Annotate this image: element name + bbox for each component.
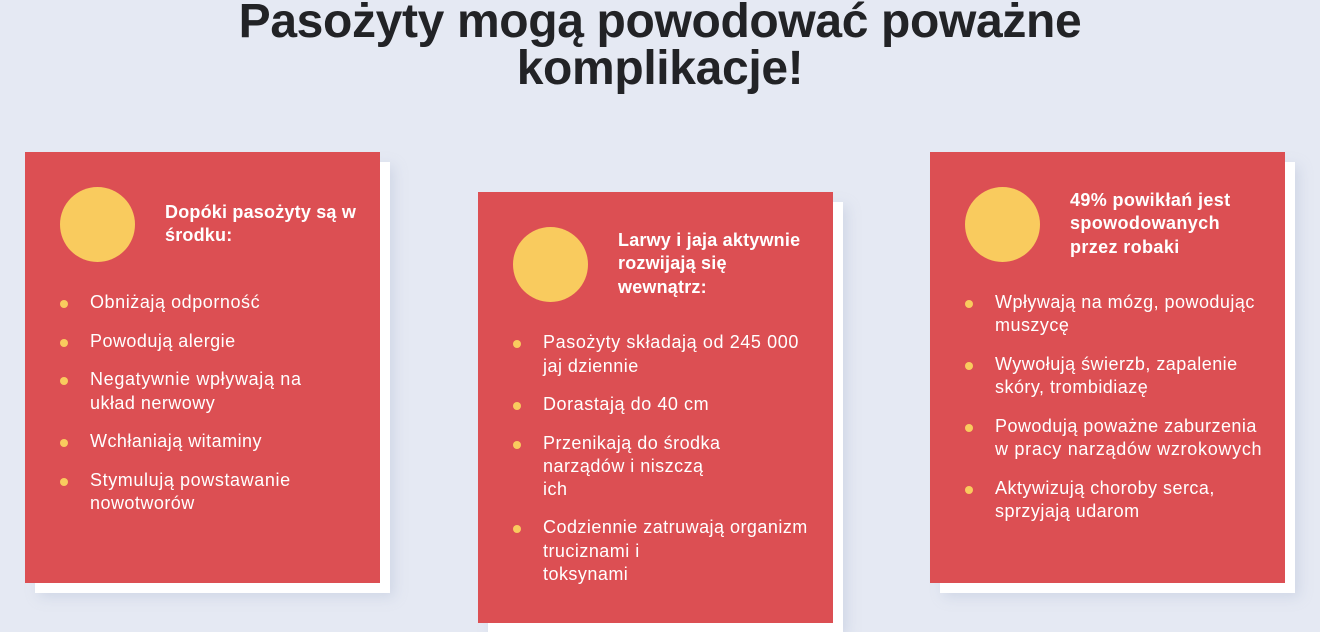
left card heading: środku: xyxy=(165,225,232,245)
right item 3 xyxy=(995,415,1262,462)
icon: right circle xyxy=(965,187,1040,262)
panel: left card xyxy=(25,152,380,583)
card shadow: right xyxy=(940,162,1295,593)
right item 1: muszycę xyxy=(995,315,1069,335)
middle item 4 xyxy=(543,516,808,587)
middle card heading: wewnątrz: xyxy=(618,277,707,297)
middle item 4: truciznami i xyxy=(543,541,640,561)
middle item 3 xyxy=(543,432,720,502)
left item 5: nowotworów xyxy=(90,493,195,513)
right item 3: Powodują poważne zaburzenia xyxy=(995,416,1257,436)
panel: right card xyxy=(930,152,1285,583)
middle item 1: jaj dziennie xyxy=(543,356,639,376)
left item 3 xyxy=(90,368,302,415)
card shadow: middle xyxy=(488,202,843,632)
middle item 2: Dorastają do 40 cm xyxy=(543,394,709,414)
left item 2: Powodują alergie xyxy=(90,331,236,351)
left item 5: Stymulują powstawanie xyxy=(90,470,291,490)
left item 3: Negatywnie wpływają na xyxy=(90,369,302,389)
middle item 1: Pasożyty składają od 245 000 xyxy=(543,332,799,352)
middle card heading xyxy=(618,230,800,297)
left card heading: Dopóki pasożyty są w xyxy=(165,202,356,222)
right item 4 xyxy=(995,477,1215,524)
right item 1: Wpływają na mózg, powodując xyxy=(995,292,1255,312)
middle item 3: ich xyxy=(543,479,567,499)
right card heading: spowodowanych xyxy=(1070,213,1220,233)
icon: left circle xyxy=(60,187,135,262)
panel: middle card xyxy=(478,192,833,623)
right item 2: skóry, trombidiazę xyxy=(995,377,1148,397)
card shadow: left xyxy=(35,162,390,593)
right card heading: 49% powikłań jest xyxy=(1070,190,1231,210)
icon: middle circle xyxy=(513,227,588,302)
middle item 4: toksynami xyxy=(543,564,628,584)
right item 2 xyxy=(995,353,1238,400)
left item 3: układ nerwowy xyxy=(90,393,215,413)
middle item 4: Codziennie zatruwają organizm xyxy=(543,517,808,537)
middle item 1 xyxy=(543,331,799,378)
right item 4: Aktywizują choroby serca, xyxy=(995,478,1215,498)
middle card heading: Larwy i jaja aktywnie xyxy=(618,230,800,250)
left item 4: Wchłaniają witaminy xyxy=(90,431,262,451)
right item 3: w pracy narządów wzrokowych xyxy=(995,439,1262,459)
title: komplikacje! xyxy=(517,42,803,94)
right card heading: przez robaki xyxy=(1070,237,1180,257)
middle item 3: narządów i niszczą xyxy=(543,456,704,476)
right item 2: Wywołują świerzb, zapalenie xyxy=(995,354,1238,374)
middle item 3: Przenikają do środka xyxy=(543,433,720,453)
left item 1: Obniżają odporność xyxy=(90,292,260,312)
middle card heading: rozwijają się xyxy=(618,253,727,273)
left item 5 xyxy=(90,469,291,515)
right card heading xyxy=(1070,190,1231,257)
left card heading xyxy=(165,202,356,245)
title xyxy=(239,0,1081,94)
right item 4: sprzyjają udarom xyxy=(995,501,1140,521)
right item 1 xyxy=(995,291,1255,338)
